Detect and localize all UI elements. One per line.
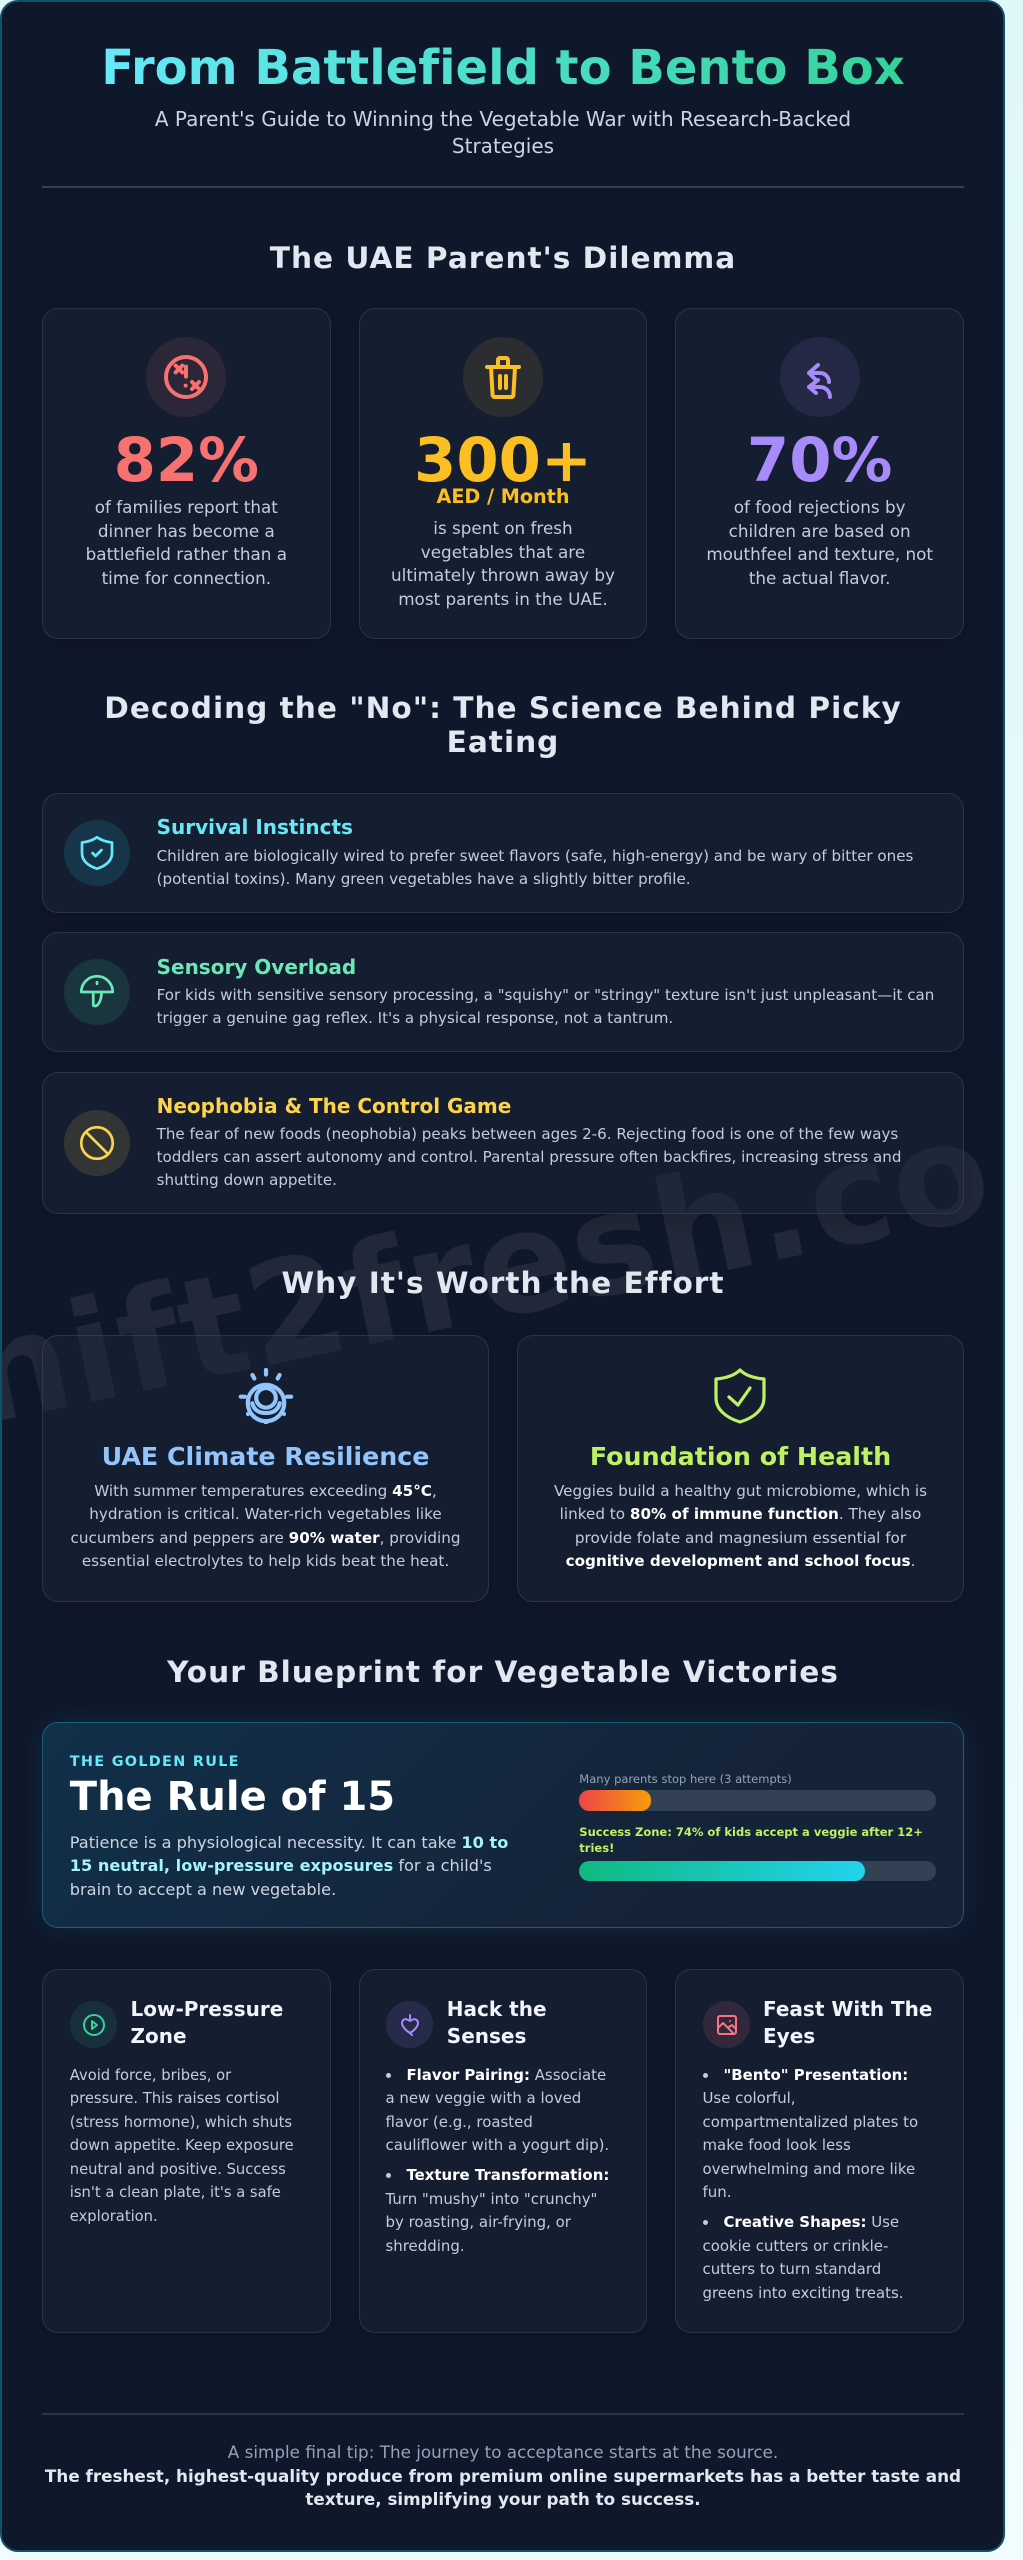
panel: sensory overload [42, 932, 964, 1052]
card title: senses: Senses [447, 2024, 526, 2048]
item text: survival: Children are biologically wired to prefer sweet flavors (safe, high-energy) and be wary of bitter ones [157, 846, 913, 864]
card list: senses: Turn "mushy" into "crunchy" [386, 2190, 597, 2208]
stat: 82%: 82% [114, 426, 259, 496]
stat text: 300+: most parents in the UAE. [398, 589, 608, 609]
feature text: climate: cucumbers and peppers are 90% water, providing [71, 1529, 460, 1547]
icon: heart sprout [386, 2001, 433, 2048]
card title: low-pressure: Low-Pressure [130, 1997, 283, 2021]
rule title: The Rule of 15 [70, 1774, 395, 1820]
card list: eyes: Use colorful, [702, 2089, 796, 2107]
heading: decoding: Eating [447, 725, 559, 759]
icon: shield check [64, 820, 130, 886]
feature title: foundation: Foundation of Health [590, 1442, 891, 1471]
card text: low-pressure: Avoid force, bribes, or [70, 2067, 231, 2084]
feature text: foundation: provide folate and magnesium essential for [575, 1529, 906, 1547]
card list: senses: Flavor Pairing: Associate [406, 2066, 606, 2084]
bar: 3 attempts [579, 1790, 936, 1810]
rule text: 15 neutral, low-pressure exposures for a child's [70, 1856, 492, 1875]
icon: play circle [70, 2001, 117, 2048]
stat text: 70%: children are based on [729, 521, 911, 541]
stat text: 70%: of food rejections by [734, 497, 906, 517]
item text: sensory: For kids with sensitive sensory processing, a "squishy" or "stringy" texture isn't just unpleasant—it can [157, 986, 934, 1004]
label: golden rule: THE GOLDEN RULE [70, 1754, 240, 1770]
card list: eyes [702, 2066, 918, 2302]
stat: 300+: 300+ [414, 426, 592, 496]
card text: low-pressure: down appetite. Keep exposure [70, 2137, 294, 2154]
icon: ban [64, 1110, 130, 1176]
footer note: texture, simplifying your path to success. [305, 2489, 701, 2509]
card list: eyes: cutters to turn standard [702, 2260, 881, 2278]
icon: sun [238, 1368, 294, 1424]
panel: stat 300+ [359, 308, 647, 639]
bar label: parents: Many parents stop here (3 attempts) [579, 1772, 792, 1786]
feature text: foundation: linked to 80% of immune function. They also [560, 1505, 921, 1523]
card list: senses: shredding. [386, 2237, 465, 2255]
item text: sensory: trigger a genuine gag reflex. It's a physical response, not a tantrum. [157, 1009, 673, 1027]
stat text: 82% [86, 497, 287, 588]
card title: senses: Hack the [447, 1997, 547, 2021]
card list: senses: a new veggie with a loved [386, 2089, 581, 2107]
item text: neophobia: shutting down appetite. [157, 1171, 337, 1189]
item title: survival: Survival Instincts [157, 815, 353, 839]
card list: eyes: overwhelming and more like [702, 2160, 915, 2178]
card title: low-pressure [130, 1997, 283, 2048]
card list: eyes: Creative Shapes: Use [723, 2213, 899, 2231]
icon: image [703, 2001, 750, 2048]
stat: 70%: 70% [747, 426, 892, 496]
card list: eyes: compartmentalized plates to [702, 2113, 918, 2131]
item text: survival [157, 846, 913, 888]
card text: low-pressure: exploration. [70, 2208, 158, 2225]
feature title: climate: UAE Climate Resilience [102, 1442, 429, 1471]
feature text: foundation: Veggies build a healthy gut microbiome, which is [554, 1482, 927, 1500]
feature text: climate: hydration is critical. Water-rich vegetables like [89, 1505, 442, 1523]
card text: low-pressure: neutral and positive. Success [70, 2161, 286, 2178]
footer note [44, 2442, 961, 2509]
heading: blueprint: Your Blueprint for Vegetable Victories [167, 1655, 839, 1689]
stat text: 82%: battlefield rather than a [86, 544, 287, 564]
card list: eyes: "Bento" Presentation: [723, 2066, 908, 2084]
stat text: 82%: of families report that [95, 497, 278, 517]
panel: hack the senses [359, 1969, 647, 2333]
panel: climate resilience [42, 1335, 489, 1602]
bar: 12+ tries [579, 1860, 936, 1881]
chart: attempts bars [579, 1772, 936, 1881]
bar label: success: Success Zone: 74% of kids accept a veggie after 12+ [579, 1825, 923, 1839]
feature text: climate: With summer temperatures exceeding 45°C, [94, 1482, 437, 1500]
title: From Battlefield to Bento Box [101, 40, 905, 96]
card list: eyes: fun. [702, 2183, 731, 2201]
card text: low-pressure: (stress hormone), which shuts [70, 2114, 292, 2131]
card list: senses: flavor (e.g., roasted [386, 2113, 533, 2131]
card title: senses [447, 1997, 547, 2048]
heading: decoding: Decoding the "No": The Science Behind Picky [104, 691, 902, 725]
card list: senses: by roasting, air-frying, or [386, 2213, 571, 2231]
stat text: 70%: mouthfeel and texture, not [706, 544, 933, 564]
item text: neophobia: The fear of new foods (neophobia) peaks between ages 2-6. Rejecting food is one of the few ways [157, 1125, 898, 1143]
panel: stat 70% [675, 308, 964, 639]
item text: sensory [157, 986, 934, 1027]
card title: eyes: Eyes [763, 2024, 815, 2048]
item text: survival: (potential toxins). Many green vegetables have a slightly bitter profile. [157, 870, 691, 888]
panel: feast with the eyes [675, 1969, 964, 2333]
item text: neophobia: toddlers can assert autonomy and control. Parental pressure often backfires, increasing stress and [157, 1148, 901, 1166]
icon: battle plan [146, 337, 226, 417]
stat text: 70% [706, 497, 933, 588]
stat text: 70%: the actual flavor. [749, 568, 890, 588]
panel: survival instincts [42, 793, 964, 913]
bar label: success: tries! [579, 1841, 614, 1855]
icon: shield check [714, 1368, 766, 1424]
item text: neophobia [156, 1125, 901, 1189]
card title: eyes: Feast With The [763, 1997, 932, 2021]
card list: senses: Texture Transformation: [406, 2166, 609, 2184]
rule text: brain to accept a new vegetable. [70, 1880, 336, 1899]
panel: rule of 15 [42, 1722, 964, 1928]
icon: trash [463, 337, 543, 417]
rule text: Patience is a physiological necessity. It can take 10 to [70, 1833, 508, 1852]
feature text: climate [71, 1482, 460, 1570]
card text: low-pressure: pressure. This raises cortisol [70, 2090, 280, 2107]
heading: decoding [104, 691, 902, 759]
card list: eyes: make food look less [702, 2136, 851, 2154]
stat text: 300+ [391, 518, 615, 609]
stat text: 300+: ultimately thrown away by [391, 565, 615, 585]
icon: double undo [780, 337, 860, 417]
subtitle [155, 107, 851, 158]
panel: low-pressure zone [42, 1969, 331, 2333]
rule text [70, 1833, 508, 1899]
stat text: 300+: vegetables that are [421, 542, 585, 562]
subtitle: A Parent's Guide to Winning the Vegetable War with Research-Backed [155, 107, 851, 131]
item title: neophobia: Neophobia & The Control Game [157, 1094, 511, 1118]
card list: eyes: cookie cutters or crinkle- [702, 2237, 888, 2255]
card list: senses [385, 2066, 609, 2255]
bar label: success [579, 1825, 923, 1855]
card list: senses: cauliflower with a yogurt dip). [386, 2136, 609, 2154]
stat text: 82%: dinner has become a [98, 521, 275, 541]
panel: stat 82% [42, 308, 331, 639]
feature text: climate: essential electrolytes to help kids beat the heat. [82, 1552, 449, 1570]
footer note: A simple final tip: The journey to acceptance starts at the source. [228, 2442, 778, 2462]
footer note: The freshest, highest-quality produce from premium online supermarkets has a better taste and [45, 2466, 961, 2486]
icon: umbrella [64, 959, 130, 1025]
panel: neophobia [42, 1072, 964, 1214]
card text: low-pressure [70, 2067, 294, 2225]
card title: eyes [763, 1997, 932, 2048]
card title: low-pressure: Zone [130, 2024, 187, 2048]
card list: eyes: greens into exciting treats. [702, 2284, 904, 2302]
panel: foundation of health [517, 1335, 964, 1602]
card text: low-pressure: isn't a clean plate, it's a safe [70, 2184, 281, 2201]
item title: sensory: Sensory Overload [157, 955, 356, 979]
heading: why worth it: Why It's Worth the Effort [281, 1266, 725, 1300]
subtitle: Strategies [452, 134, 554, 158]
stat unit: AED / Month [436, 485, 570, 508]
heading: dilemma: The UAE Parent's Dilemma [270, 241, 736, 275]
feature text: foundation: cognitive development and school focus. [566, 1552, 915, 1570]
feature text: foundation [554, 1482, 927, 1570]
stat text: 82%: time for connection. [102, 568, 271, 588]
stat text: 300+: is spent on fresh [433, 518, 573, 538]
